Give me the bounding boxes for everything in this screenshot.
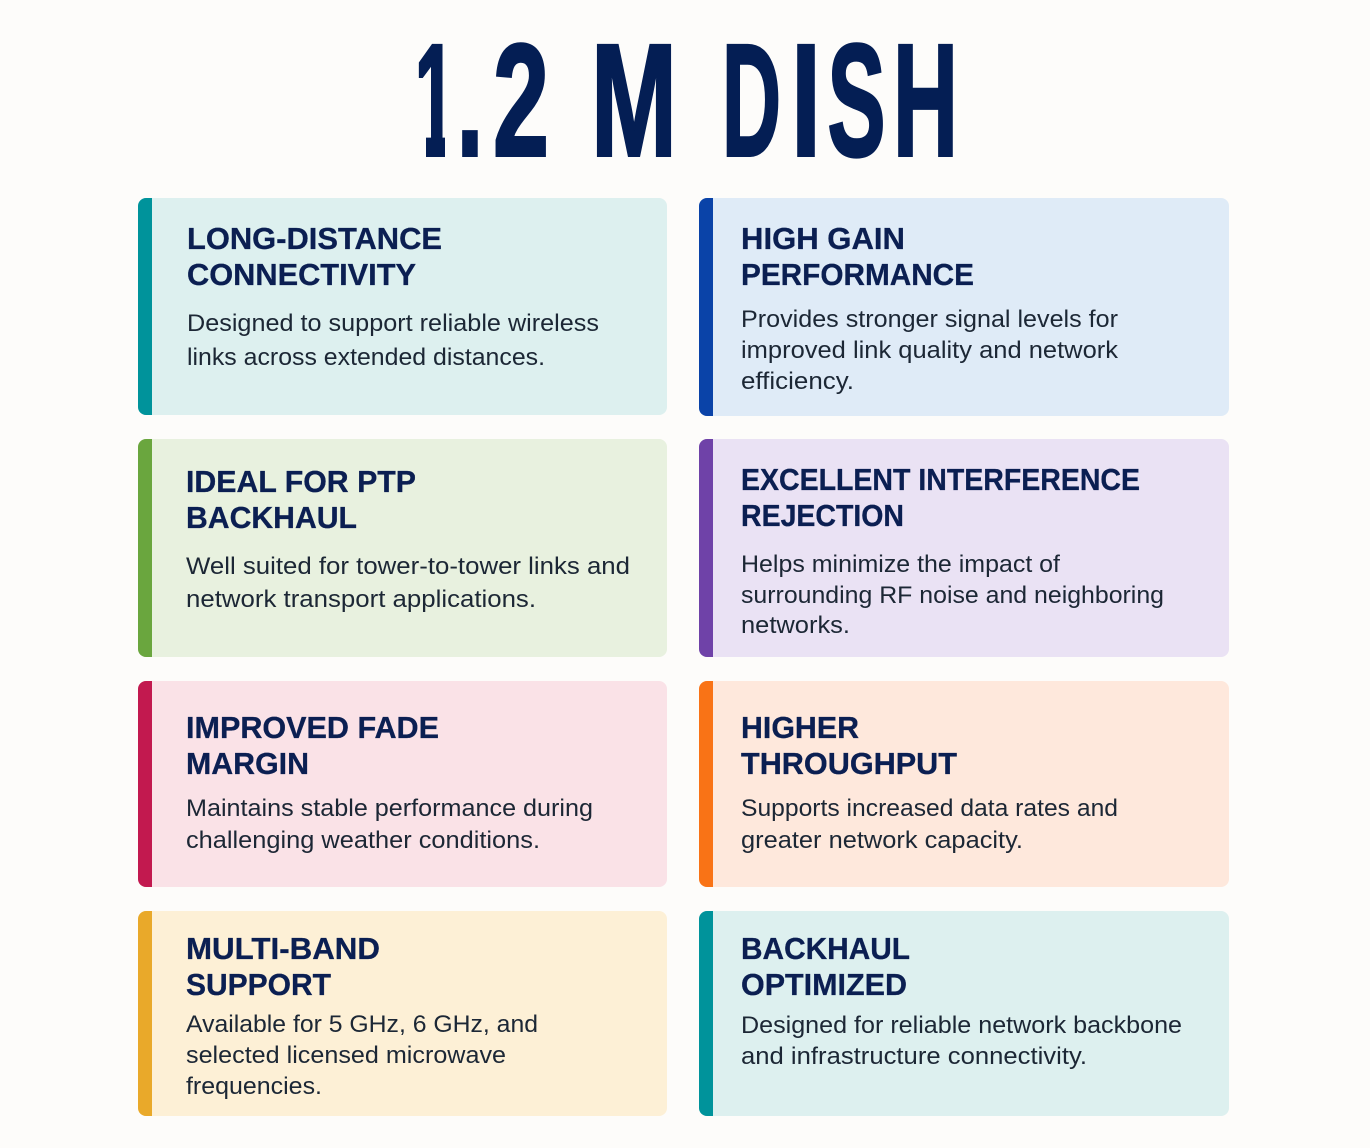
title: 2 [493, 10, 549, 190]
panel: excellent interference rejection: REJECTION [741, 498, 904, 533]
panel: multi-band support: MULTI-BAND [186, 931, 380, 966]
panel: high gain performance: PERFORMANCE [741, 257, 974, 292]
panel: high gain performance: improved link quality and network [741, 337, 1119, 364]
panel: multi-band support: selected licensed microwave [186, 1042, 506, 1069]
title: D [722, 10, 781, 190]
title: 1 [414, 10, 456, 190]
panel: backhaul optimized: OPTIMIZED [741, 967, 907, 1002]
title: I [791, 10, 821, 190]
panel: backhaul optimized: Designed for reliable network backbone [741, 1012, 1182, 1039]
panel: excellent interference rejection: EXCELLENT INTERFERENCE [741, 462, 1140, 497]
title: M [591, 10, 677, 190]
panel: high gain performance: HIGH GAIN [741, 221, 905, 256]
panel: excellent interference rejection: Helps minimize the impact of [741, 551, 1060, 578]
panel: long-distance connectivity: LONG-DISTANCE [187, 221, 442, 256]
panel: backhaul optimized: and infrastructure connectivity. [741, 1043, 1087, 1070]
panel: higher throughput: greater network capacity. [741, 827, 1023, 854]
panel: high gain performance: Provides stronger signal levels for [741, 306, 1118, 333]
panel: improved fade margin: challenging weather conditions. [186, 827, 540, 854]
panel: multi-band support: Available for 5 GHz, 6 GHz, and [186, 1011, 538, 1038]
panel: multi-band support: frequencies. [186, 1073, 322, 1100]
panel: backhaul optimized [699, 911, 1229, 1116]
panel: ideal for ptp backhaul: network transport applications. [186, 586, 536, 613]
panel: excellent interference rejection: surrounding RF noise and neighboring [741, 582, 1164, 609]
panel: higher throughput [699, 681, 1229, 887]
title: H [893, 10, 958, 190]
panel: ideal for ptp backhaul [138, 439, 667, 657]
title [418, 42, 953, 159]
panel: ideal for ptp backhaul: IDEAL FOR PTP [186, 464, 416, 499]
panel: long-distance connectivity [138, 198, 667, 415]
panel: excellent interference rejection [699, 439, 1229, 657]
panel: higher throughput: Supports increased data rates and [741, 795, 1118, 822]
panel: improved fade margin [138, 681, 667, 887]
panel: improved fade margin: IMPROVED FADE [186, 710, 439, 745]
panel: long-distance connectivity: CONNECTIVITY [187, 257, 416, 292]
panel: long-distance connectivity: Designed to support reliable wireless [187, 310, 599, 337]
panel: improved fade margin: Maintains stable performance during [186, 795, 593, 822]
panel: excellent interference rejection: networks. [741, 612, 850, 639]
panel: backhaul optimized: BACKHAUL [741, 931, 910, 966]
panel: high gain performance [699, 198, 1229, 416]
panel: ideal for ptp backhaul: BACKHAUL [186, 500, 357, 535]
panel: improved fade margin: MARGIN [186, 746, 309, 781]
title: . [456, 10, 484, 190]
panel: multi-band support: SUPPORT [186, 967, 331, 1002]
panel: higher throughput: HIGHER [741, 710, 859, 745]
panel: multi-band support [138, 911, 667, 1116]
title: S [828, 10, 886, 190]
panel: higher throughput: THROUGHPUT [741, 746, 957, 781]
panel: high gain performance: efficiency. [741, 368, 854, 395]
panel: ideal for ptp backhaul: Well suited for tower-to-tower links and [186, 553, 630, 580]
panel: long-distance connectivity: links across extended distances. [187, 344, 545, 371]
